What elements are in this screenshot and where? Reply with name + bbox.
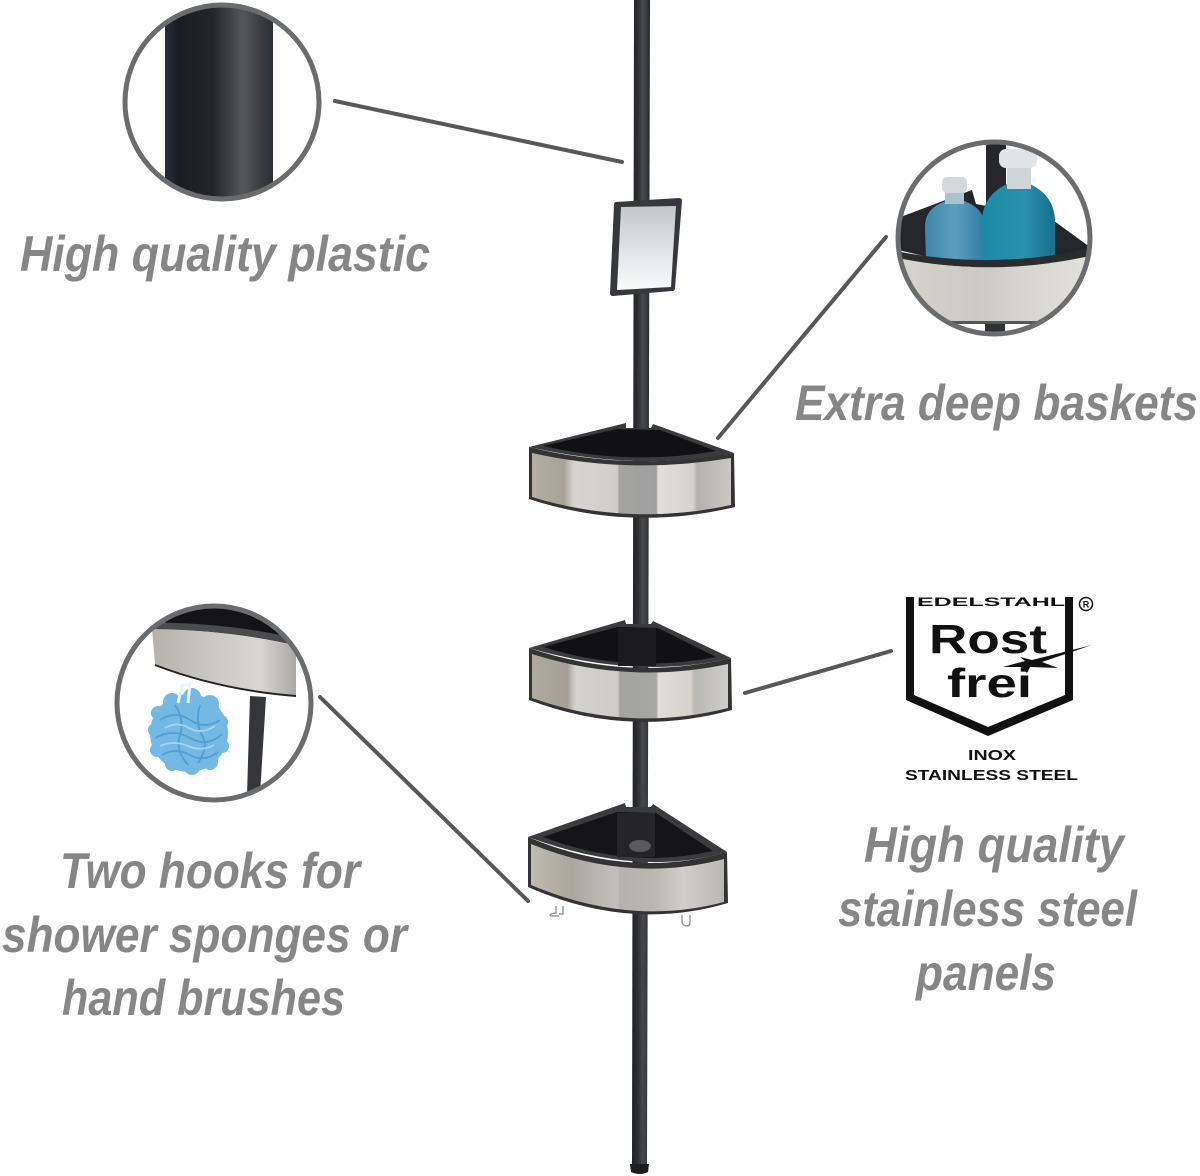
callout line: stainless steel <box>745 651 891 693</box>
logo: Edelstahl Rostfrei stainless steel mark: R <box>1083 600 1090 610</box>
logo: Edelstahl Rostfrei stainless steel mark: Rost <box>929 616 1047 662</box>
detail circle: plastic pole <box>125 0 319 210</box>
callout line: baskets <box>718 237 886 438</box>
logo: Edelstahl Rostfrei stainless steel mark: EDELSTAHL <box>917 595 1065 609</box>
basket 3 <box>528 803 728 926</box>
label: hooks for sponges: hand brushes <box>62 970 345 1026</box>
callout line: plastic <box>335 101 622 162</box>
basket 1 <box>529 423 735 518</box>
bottle large <box>982 149 1055 263</box>
label: High quality plastic: High quality plastic <box>20 226 430 282</box>
label: hooks for sponges <box>2 843 409 1026</box>
detail circle: deep basket with bottles <box>898 135 1094 340</box>
label: stainless steel panels: High quality <box>864 817 1126 873</box>
callout line: hooks <box>320 697 528 901</box>
label: stainless steel panels <box>838 817 1138 1001</box>
central tension pole <box>630 0 650 1174</box>
basket 2 <box>529 620 732 722</box>
sponge <box>148 684 229 775</box>
detail circle: hook with sponge <box>117 600 311 800</box>
bottle small <box>925 177 985 261</box>
label: stainless steel panels: stainless steel <box>838 881 1138 937</box>
label: stainless steel panels: panels <box>914 945 1056 1001</box>
logo: Edelstahl Rostfrei stainless steel mark: INOX <box>968 747 1016 764</box>
label: hooks for sponges: shower sponges or <box>2 907 409 963</box>
logo: Edelstahl Rostfrei stainless steel mark: STAINLESS STEEL <box>905 767 1078 784</box>
logo: Edelstahl Rostfrei stainless steel mark <box>905 595 1092 784</box>
logo: Edelstahl Rostfrei stainless steel mark: frei <box>947 660 1032 706</box>
label: hooks for sponges: Two hooks for <box>60 843 362 899</box>
icon: hooks under basket <box>550 906 690 926</box>
mirror <box>610 198 682 296</box>
